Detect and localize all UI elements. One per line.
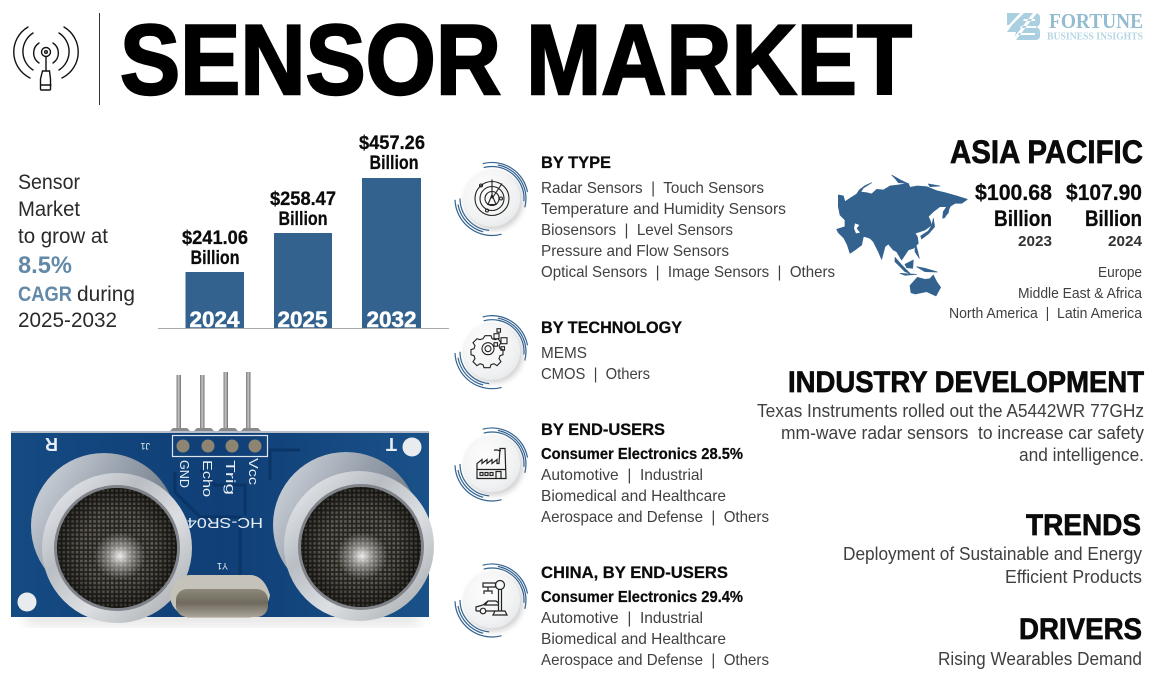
board silkscreen labels: Y1	[217, 561, 228, 571]
bar: 2025: $258.47	[270, 189, 336, 210]
text: CAGR summary: during	[77, 283, 135, 306]
other regions: North America | Latin America	[949, 305, 1143, 322]
pins	[169, 372, 262, 433]
segment: by technology: BY TECHNOLOGY	[541, 318, 683, 337]
board silkscreen labels: GND	[177, 460, 192, 488]
segment: by technology: CMOS | Others	[541, 366, 650, 383]
logo: Fortune Business Insights: BUSINESS INSIGHTS	[1047, 32, 1143, 42]
text: CAGR summary: Sensor	[18, 171, 80, 194]
bar: 2024: $241.06	[182, 228, 248, 249]
icon: gear technology	[455, 316, 528, 389]
stat: 2024: Billion	[1085, 206, 1142, 231]
bar: 2032: 2032	[366, 307, 416, 332]
text: CAGR summary: 2025-2032	[18, 309, 117, 332]
heading: Asia Pacific: ASIA PACIFIC	[950, 134, 1143, 170]
text: CAGR summary: Market	[18, 198, 80, 221]
segment: by end-users: BY END-USERS	[541, 420, 665, 439]
drivers	[938, 613, 1142, 669]
icon: radar	[455, 162, 528, 235]
segment: China, by end-users: Aerospace and Defense | Others	[541, 652, 769, 669]
segment: China, by end-users: Automotive | Industrial	[541, 610, 703, 627]
left transducer	[31, 453, 192, 623]
bar chart: market size	[158, 133, 449, 332]
title: SENSOR MARKET	[120, 4, 912, 115]
board silkscreen labels: R	[45, 434, 58, 454]
board silkscreen labels: Vcc	[246, 458, 261, 486]
drivers: Rising Wearables Demand	[938, 649, 1142, 669]
board silkscreen labels: J1	[140, 441, 150, 451]
segment: by end-users: Automotive | Industrial	[541, 467, 703, 484]
text: CAGR summary: CAGR	[18, 283, 72, 306]
bar: 2024: 2024	[190, 307, 240, 332]
segment: by type: Temperature and Humidity Sensors	[541, 201, 786, 218]
segment: China, by end-users	[541, 563, 769, 669]
circuit board	[11, 432, 429, 617]
segment: by type: Optical Sensors | Image Sensors | Others	[541, 264, 835, 281]
segment: by type: Radar Sensors | Touch Sensors	[541, 180, 764, 197]
divider	[99, 13, 100, 105]
industry development: Texas Instruments rolled out the A5442WR 77GHz	[757, 401, 1144, 421]
logo: Fortune Business Insights: FORTUNE	[1049, 9, 1143, 33]
board silkscreen labels: T	[386, 434, 397, 454]
drivers: DRIVERS	[1019, 613, 1142, 646]
stat: 2024: 2024	[1108, 233, 1143, 250]
icon: factory	[455, 428, 528, 501]
text: CAGR summary: 8.5%	[18, 252, 72, 279]
segment: by end-users: Consumer Electronics 28.5%	[541, 446, 743, 463]
stat: 2024	[1066, 180, 1143, 250]
icon: antenna signal	[14, 27, 78, 90]
right transducer	[273, 452, 434, 621]
other regions	[949, 264, 1143, 322]
segment: by technology: MEMS	[541, 345, 587, 362]
segment: by end-users: Biomedical and Healthcare	[541, 488, 726, 505]
segment: by type: Pressure and Flow Sensors	[541, 243, 729, 260]
bar: 2032	[359, 133, 425, 332]
industry development: mm-wave radar sensors to increase car safety	[781, 423, 1144, 443]
segment: by type: Biosensors | Level Sensors	[541, 222, 733, 239]
stat: 2023: $100.68	[975, 180, 1052, 205]
map: Asia Pacific	[837, 175, 967, 296]
board silkscreen labels: HC-SR04	[187, 514, 263, 531]
other regions: Middle East & Africa	[1018, 285, 1143, 302]
bar: 2032: Billion	[370, 153, 418, 174]
segment: China, by end-users: Consumer Electronics 29.4%	[541, 589, 743, 606]
image: ultrasonic sensor module	[11, 372, 434, 624]
bar: 2032: $457.26	[359, 133, 425, 154]
text: CAGR summary	[18, 171, 135, 332]
board silkscreen labels	[45, 434, 397, 571]
board silkscreen labels: Trig	[223, 460, 238, 495]
trends: Deployment of Sustainable and Energy	[843, 544, 1142, 564]
trends: TRENDS	[1026, 509, 1141, 542]
segment: by end-users: Aerospace and Defense | Others	[541, 509, 769, 526]
bar: 2025: 2025	[278, 307, 328, 332]
segment: by type	[541, 153, 835, 281]
other regions: Europe	[1098, 264, 1142, 281]
crystal oscillator	[170, 575, 270, 618]
stat: 2023: 2023	[1018, 233, 1052, 250]
industry development: and intelligence.	[1019, 445, 1144, 465]
bar: 2025	[270, 189, 336, 332]
segment: China, by end-users: Biomedical and Healthcare	[541, 631, 726, 648]
bar: 2025: Billion	[278, 209, 328, 230]
industry development	[757, 366, 1144, 465]
logo: Fortune Business Insights	[1007, 9, 1143, 42]
stat: 2023: Billion	[994, 206, 1052, 231]
bar: 2024: Billion	[190, 248, 240, 269]
text: CAGR summary: to grow at	[18, 225, 108, 248]
segment: China, by end-users: CHINA, BY END-USERS	[541, 563, 728, 582]
bar: 2024	[182, 228, 248, 332]
stat: 2024: $107.90	[1066, 180, 1142, 205]
segment: by end-users	[541, 420, 769, 526]
trends: Efficient Products	[1005, 567, 1142, 587]
stat: 2023	[975, 180, 1052, 250]
segment: by type: BY TYPE	[541, 153, 611, 172]
board silkscreen labels: Echo	[200, 460, 215, 497]
segment: by technology	[541, 318, 683, 383]
icon: car assembly robot	[455, 564, 528, 637]
trends	[843, 509, 1142, 587]
